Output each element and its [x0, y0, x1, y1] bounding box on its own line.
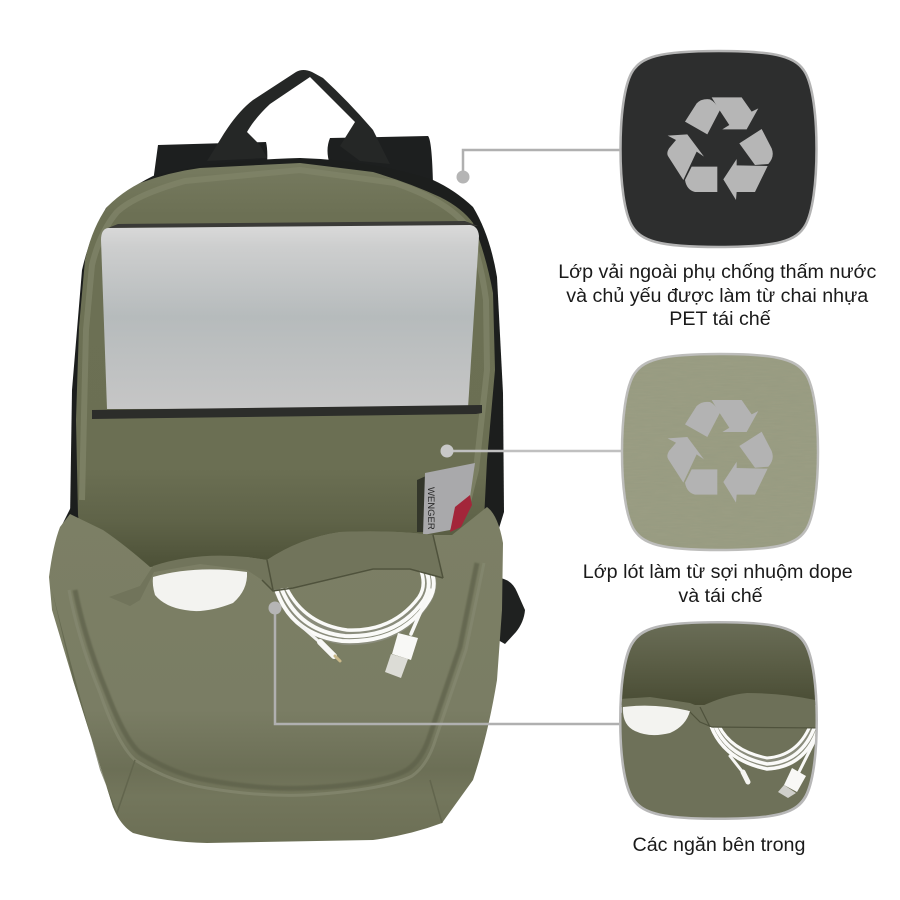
callout line 1	[456, 150, 622, 184]
front flap	[49, 507, 503, 843]
icon: recycle symbol	[667, 97, 773, 200]
base seams	[117, 760, 442, 823]
coil strands	[277, 568, 434, 641]
back panel edge and zipper	[70, 158, 504, 590]
pocket zip edge	[92, 405, 482, 419]
side strap	[498, 578, 525, 644]
tag text: WENGER	[425, 487, 436, 530]
badge: outer fabric recycle	[620, 51, 816, 247]
callout line 3	[268, 602, 622, 724]
marker dot 3	[268, 602, 282, 614]
dark pocket interior	[622, 624, 816, 705]
fabric pocket	[622, 712, 816, 818]
cable coil	[277, 568, 434, 678]
callout line 2	[440, 444, 622, 458]
badge: inner compartments photo	[615, 620, 825, 825]
text: outer fabric description: và chủ yếu được làm từ chai nhựa	[566, 285, 868, 307]
tag body	[423, 463, 475, 535]
red tab	[450, 495, 472, 532]
text: lining description: và tái chế	[678, 585, 763, 607]
marker dot 1	[456, 170, 470, 184]
mouse	[623, 706, 690, 735]
left body sliver	[50, 505, 95, 590]
label tag	[417, 463, 475, 535]
backpack illustration	[49, 70, 525, 843]
open compartment lining	[76, 163, 495, 600]
inner flap panel stitching	[75, 563, 477, 788]
lining rim piping	[82, 170, 487, 510]
pocket flap shadow edge	[262, 535, 443, 591]
text: outer fabric description: Lớp vải ngoài phụ chống thấm nước	[558, 261, 876, 283]
dark band above laptop	[108, 221, 478, 228]
text: outer fabric description: PET tái chế	[669, 308, 771, 330]
pocket flaps	[109, 531, 443, 606]
lightning connector	[300, 625, 324, 646]
black back shoulder pads	[153, 136, 433, 185]
coil strands	[711, 726, 819, 769]
pocket flap	[620, 693, 820, 728]
tag backing	[417, 476, 426, 532]
coil shadow	[281, 568, 429, 638]
text: lining description: Lớp lót làm từ sợi nhuộm dope	[583, 561, 853, 583]
usb cable run	[411, 590, 430, 634]
icon: recycle symbol	[667, 400, 773, 503]
laptop	[101, 225, 479, 409]
flap shadow edge	[688, 707, 820, 728]
fabric texture	[623, 355, 817, 549]
mouse	[153, 569, 247, 611]
flap shadow left	[52, 590, 120, 820]
text: inner compartments description: Các ngăn bên trong	[633, 834, 805, 856]
top handle	[207, 70, 390, 164]
marker dot 2	[440, 444, 454, 458]
coil shadow	[715, 726, 815, 765]
badge: lining recycle	[622, 354, 818, 550]
usb head	[385, 654, 408, 678]
usb connector body	[392, 633, 418, 660]
coiled cable	[711, 726, 819, 798]
